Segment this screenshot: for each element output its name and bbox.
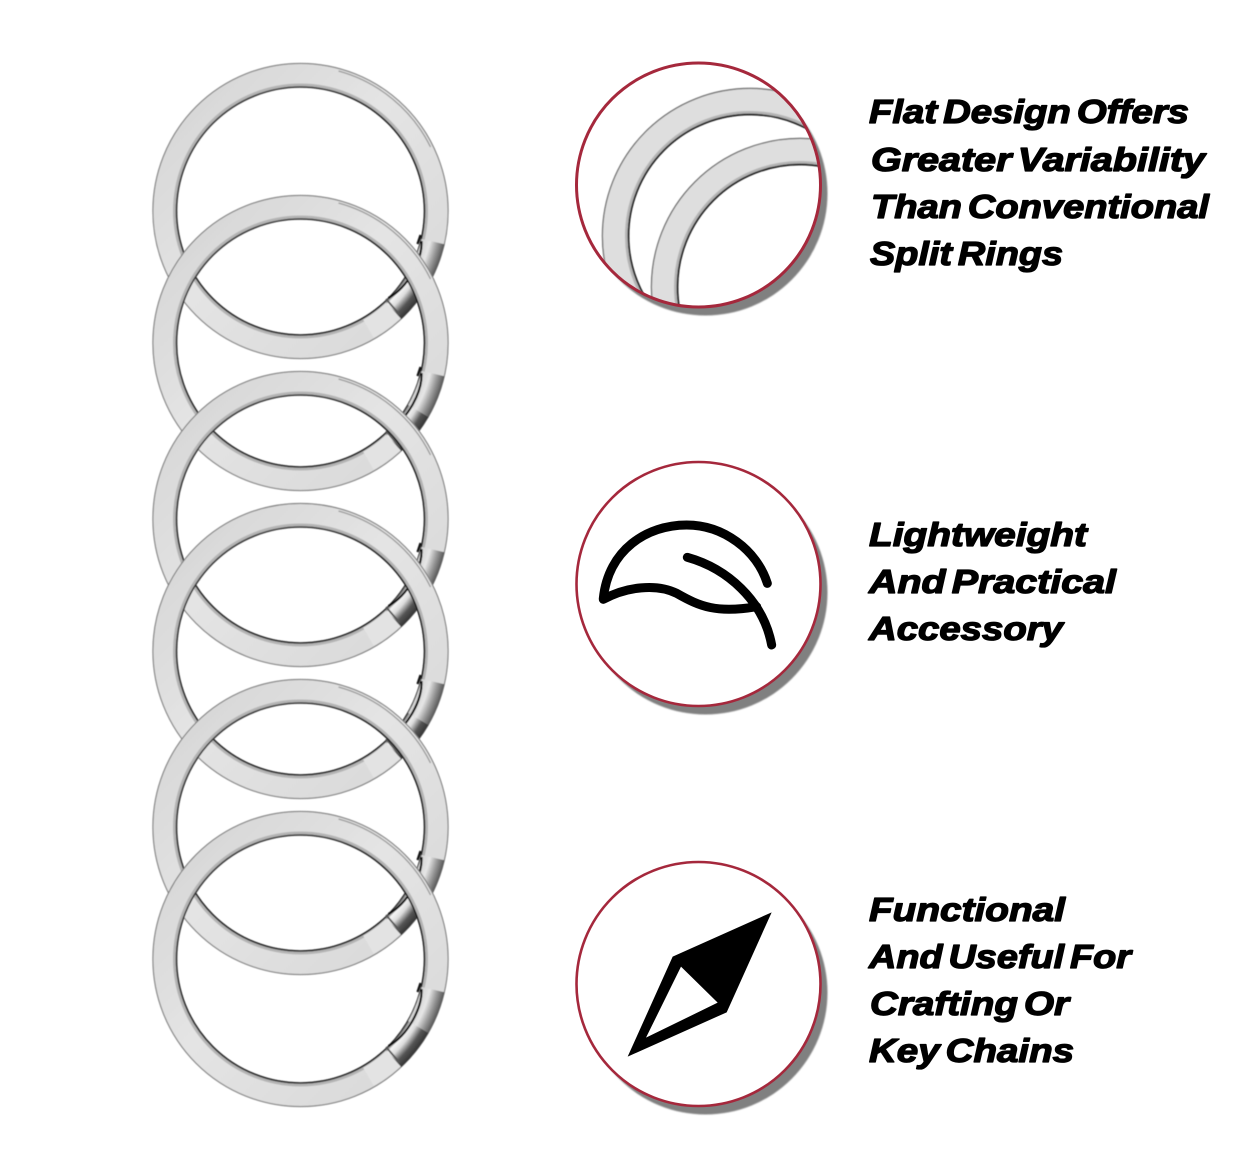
text: flat design: Flat Design Offers [869, 93, 1189, 130]
text: lightweight [868, 516, 1117, 647]
ring stack [153, 63, 448, 1107]
ring 6 [153, 811, 448, 1107]
ring 2 [153, 195, 448, 491]
text: flat design: Greater Variability [871, 141, 1207, 178]
text: functional: Key Chains [869, 1032, 1074, 1069]
text: lightweight: Accessory [868, 610, 1065, 647]
ring 1 [153, 63, 448, 359]
text: flat design: Split Rings [870, 235, 1063, 272]
text: functional: Functional [869, 891, 1066, 928]
icon: leaf [603, 525, 772, 645]
badge: leaf [576, 462, 828, 714]
ring 4 [153, 503, 448, 799]
text: lightweight: And Practical [868, 563, 1117, 600]
close-up ring arcs [601, 87, 818, 304]
text: functional [868, 891, 1133, 1069]
text: flat design: Than Conventional [871, 188, 1210, 225]
ring 3 [153, 371, 448, 667]
text: lightweight: Lightweight [869, 516, 1089, 553]
text: functional: Crafting Or [870, 985, 1072, 1022]
text: flat design [869, 93, 1210, 272]
badge: flat design close-up [575, 62, 828, 316]
icon: compass needle [628, 912, 772, 1057]
ring 5 [153, 679, 448, 975]
text: functional: And Useful For [868, 938, 1133, 975]
badge: compass [576, 862, 828, 1114]
